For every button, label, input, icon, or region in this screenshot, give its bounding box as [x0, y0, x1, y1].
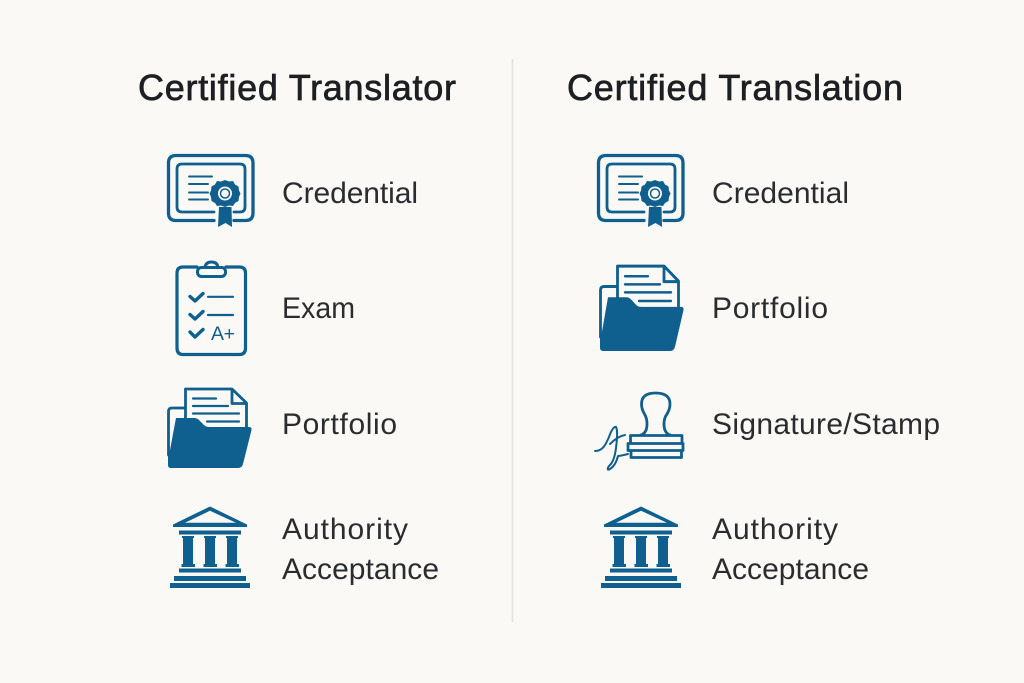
icon: authority building	[601, 506, 681, 588]
label: Authority Acceptance: Authority	[712, 513, 838, 546]
label: Authority Acceptance: Acceptance	[282, 553, 439, 586]
heading: Certified Translator: Certified Translator	[138, 67, 456, 108]
icon: credential certificate	[598, 156, 683, 227]
heading: Certified Translation: Certified Translation	[567, 67, 903, 108]
icon: credential certificate	[168, 156, 253, 227]
label: Signature/Stamp: Signature/Stamp	[712, 408, 940, 441]
panel: certified translator	[138, 67, 456, 588]
icon: signature and stamp	[595, 393, 683, 470]
label: Authority Acceptance: Authority	[282, 513, 408, 546]
icon: exam clipboard	[177, 262, 246, 354]
label: Exam: Exam	[282, 292, 355, 325]
icon: exam clipboard: A+	[211, 323, 235, 345]
panel: certified translation	[567, 67, 940, 588]
icon: portfolio folder	[168, 389, 252, 468]
icon: authority building	[170, 506, 250, 588]
label: Portfolio: Portfolio	[282, 408, 397, 441]
label: Authority Acceptance: Acceptance	[712, 553, 869, 586]
label: Portfolio: Portfolio	[712, 292, 828, 325]
label: Credential: Credential	[282, 177, 418, 210]
label: Credential: Credential	[712, 177, 849, 210]
icon: portfolio folder	[600, 266, 684, 351]
